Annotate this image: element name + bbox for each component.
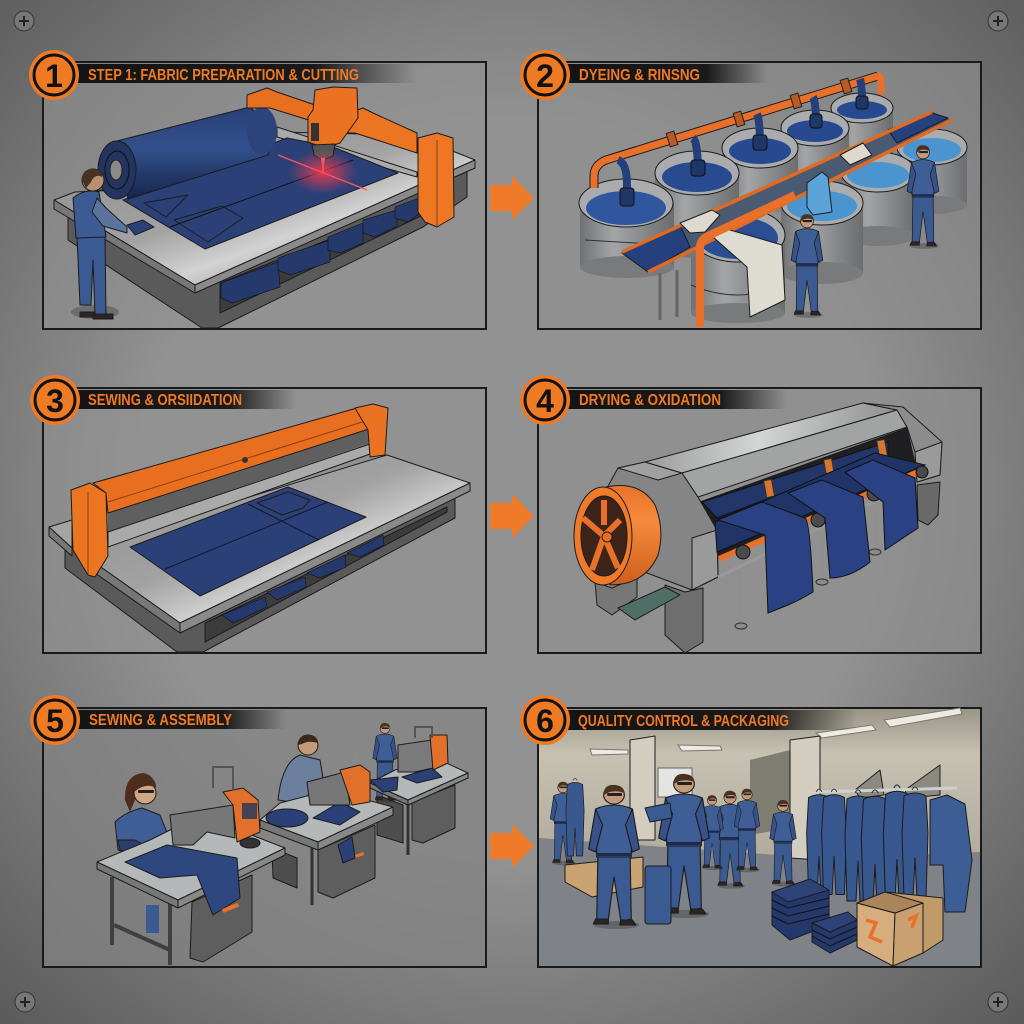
illustration: vertical orange pipe [700,195,795,327]
icon: screw top right [988,11,1008,31]
illustration: inspector holding garment [659,774,709,918]
illustration: dryer hood [607,403,942,590]
panel: step 1 fabric preparation and cutting [43,62,486,329]
illustration: denim pattern pieces [130,487,366,596]
panel: step 2 dyeing and rinsing [538,62,981,329]
illustration: open box on the left [565,857,643,897]
illustration: roller and conveyor [702,439,928,577]
heading: step 1: 1 [45,58,63,94]
heading: step 2: 2 [536,58,554,94]
heading: step 2: DYEING & RINSNG [579,67,700,84]
panel: step 3 sewing and oxidation table [43,388,486,653]
illustration: legs, poles and base plate [595,482,940,653]
illustration: middle sewing desk [260,735,393,905]
heading: step 3: 3 [46,383,64,419]
illustration: garment held between inspectors [645,803,672,924]
illustration: front sewing machine [170,767,260,848]
illustration: drying denim cloths [718,460,918,613]
icon: screw bottom right [988,992,1008,1012]
panel: step 5 sewing and assembly [43,708,486,967]
illustration: front seamstress [115,773,172,933]
illustration: laser lines [278,150,367,194]
illustration: back row dye tanks [579,93,893,278]
illustration: background workers [550,778,796,889]
arrow: step 3 to step 4 [490,494,534,538]
illustration: gantry rail behind fabric [277,127,417,177]
illustration: garment rack [807,785,972,912]
illustration: stacks of folded denim [772,879,857,953]
illustration: denim fabric sheet [123,138,398,249]
illustration: conveyor belt [622,112,952,320]
illustration: right row rinse tanks [691,129,967,323]
illustration: blue drop pipes with valves [618,79,868,206]
arrow: step 1 to step 2 [490,176,534,220]
illustration: steel table top [49,455,470,633]
illustration: front sewing desk [97,815,285,965]
icon: screw bottom left [15,992,35,1012]
heading: step 6: 6 [536,703,554,739]
heading: step 4: 4 [536,383,554,419]
illustration: rail assembly [71,404,388,577]
heading: step 1: STEP 1: FABRIC PREPARATION & CUTTING [88,67,359,84]
illustration: white cloth draped over tank [713,228,785,317]
arrow: step 5 to step 6 [490,824,534,868]
heading: step 3: SEWING & ORSIIDATION [88,392,242,409]
heading: step 6: QUALITY CONTROL & PACKAGING [578,713,789,730]
icon: screw top left [14,11,34,31]
illustration: fabric roll [98,107,277,199]
heading: step 1 [29,50,416,100]
panel: step 4 drying and oxidation [538,388,981,653]
illustration: inspector with goggles [589,785,639,929]
illustration: worker near front tank [791,214,823,318]
illustration: factory wall and ceiling [539,708,980,860]
heading: step 6 [520,695,857,745]
illustration: orange supply pipe [594,76,881,188]
illustration: worker at table seen from behind [71,169,154,319]
heading: step 5 [30,695,286,745]
illustration: orange gantry and cutter head [247,87,454,227]
heading: step 5: SEWING & ASSEMBLY [89,712,232,729]
heading: step 5: 5 [46,703,64,739]
heading: step 4: DRYING & OXIDATION [579,392,721,409]
heading: step 2 [520,50,767,100]
panel: step 6 quality control and packaging [538,708,981,967]
illustration: cutting table [54,132,475,328]
illustration: orange fan [574,485,661,585]
illustration: worker near rinse tank [907,145,939,249]
heading: step 4 [520,375,787,425]
illustration: back sewing desk [370,723,468,855]
illustration: cardboard boxes with orange logo [857,892,943,966]
illustration: table base with fabric shelves [65,498,455,652]
heading: step 3 [30,375,296,425]
